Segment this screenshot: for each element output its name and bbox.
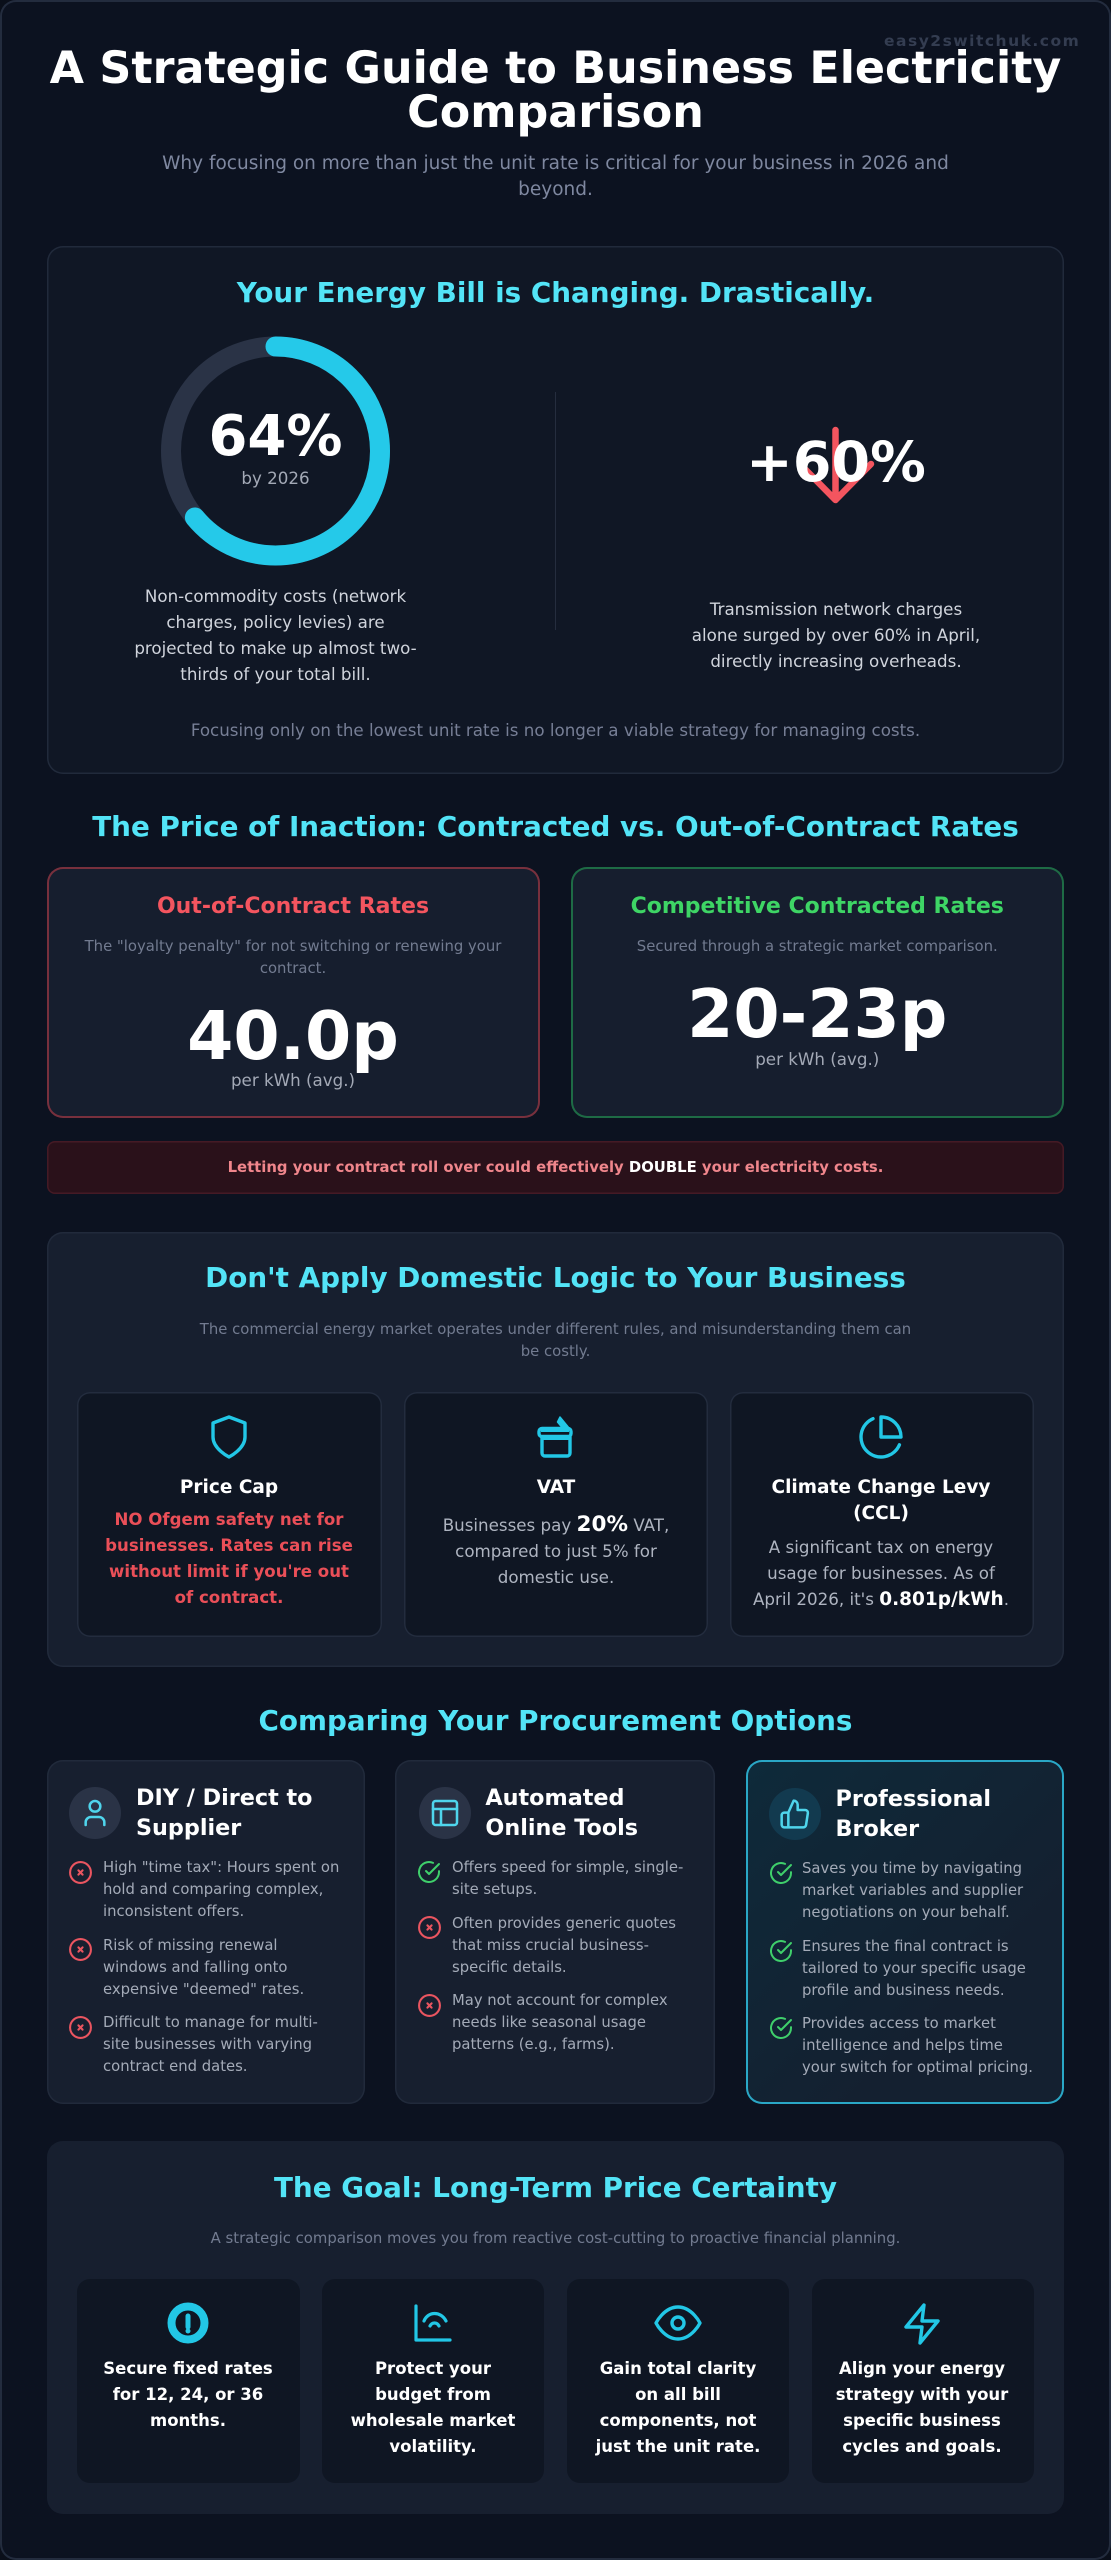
text: non-commodity costs: charges, policy levies) are: [166, 612, 385, 632]
callout text: Letting your contract roll over could effectively DOUBLE your electricity costs.: [228, 1159, 883, 1176]
drawback text: expensive "deemed" rates.: [103, 1981, 304, 1998]
goal text: volatility.: [389, 2437, 477, 2456]
card description: [84, 937, 502, 977]
icon: cross: [69, 1861, 92, 1884]
goal text: wholesale market: [351, 2411, 515, 2430]
card text: without limit if you're out: [109, 1562, 349, 1581]
card text: A significant tax on energy: [769, 1536, 993, 1556]
card text: compared to just 5% for: [455, 1540, 657, 1560]
drawback text: [103, 1937, 304, 1998]
card text: April 2026, it's 0.801p/kWh.: [753, 1588, 1009, 1610]
icon: check: [770, 1862, 792, 1884]
panel: DIY direct to supplier: [47, 1760, 365, 2104]
benefit text: intelligence and helps time: [802, 2037, 1003, 2054]
drawback text: [103, 1859, 339, 1920]
benefit text: profile and business needs.: [802, 1982, 1005, 1999]
panel: professional broker: [746, 1760, 1064, 2104]
card text: domestic use.: [498, 1566, 614, 1586]
option title: Broker: [836, 1816, 919, 1842]
card: align strategy: [812, 2279, 1034, 2483]
goal text: [322, 2356, 544, 2460]
donut chart: 64 percent: [161, 336, 390, 566]
title: Comparison: [407, 87, 704, 138]
card: protect budget: [322, 2279, 544, 2483]
text: transmission charges: [692, 599, 980, 671]
benefit text: [452, 1859, 683, 1898]
card title: Price Cap: [180, 1477, 278, 1498]
footnote: Focusing only on the lowest unit rate is no longer a viable strategy for managing costs.: [191, 720, 920, 740]
card text: Businesses pay 20% VAT,: [443, 1512, 669, 1536]
benefit text: Offers speed for simple, single-: [452, 1859, 683, 1876]
drawback text: May not account for complex: [452, 1992, 668, 2009]
panel: automated online tools: [395, 1760, 715, 2104]
benefit text: tailored to your specific usage: [802, 1960, 1026, 1977]
card title: (CCL): [853, 1503, 909, 1524]
card title: [772, 1477, 990, 1524]
drawback text: inconsistent offers.: [103, 1903, 244, 1920]
drawback text: that miss crucial business-: [452, 1937, 649, 1954]
card: VAT: [404, 1392, 708, 1637]
goal text: Align your energy: [839, 2359, 1005, 2378]
subtitle: [162, 153, 949, 200]
panel: energy bill changing: [47, 246, 1064, 774]
card description: The "loyalty penalty" for not switching or renewing your: [85, 937, 501, 955]
drawback text: [452, 1992, 668, 2053]
goal text: Gain total clarity: [600, 2359, 756, 2378]
drawback text: Often provides generic quotes: [452, 1915, 676, 1932]
drawback text: windows and falling onto: [103, 1959, 287, 1976]
goal text: [567, 2356, 789, 2460]
description: [200, 1320, 911, 1360]
panel: domestic logic: [47, 1232, 1064, 1667]
text: transmission charges: alone surged by over 60% in April,: [692, 625, 980, 645]
card title: VAT: [537, 1477, 575, 1498]
goal text: specific business: [843, 2411, 1001, 2430]
option title: [136, 1785, 313, 1841]
icon: cross: [418, 1916, 441, 1939]
drawback text: [103, 2014, 318, 2075]
icon: chart: [414, 2304, 452, 2342]
benefit text: Saves you time by navigating: [802, 1860, 1022, 1877]
option title: [485, 1785, 638, 1841]
card: total clarity: [567, 2279, 789, 2483]
subtitle: beyond.: [518, 179, 593, 200]
benefit text: your switch for optimal pricing.: [802, 2059, 1033, 2076]
benefit text: [802, 1860, 1024, 1921]
card title: Climate Change Levy: [772, 1477, 990, 1498]
panel: out-of-contract rates: [46, 867, 540, 1118]
card text: NO Ofgem safety net for: [115, 1510, 343, 1529]
card: price cap: [77, 1392, 382, 1637]
stat: 64%: 64%: [208, 404, 343, 469]
goal text: Secure fixed rates: [103, 2359, 273, 2378]
rate unit: per kWh (avg.): [755, 1048, 879, 1068]
drawback text: High "time tax": Hours spent on: [103, 1859, 339, 1876]
icon: layout: [418, 1787, 470, 1839]
goal text: Protect your: [375, 2359, 491, 2378]
benefit text: [802, 1938, 1026, 1999]
drawback text: needs like seasonal usage: [452, 2014, 646, 2031]
option title: Supplier: [136, 1815, 241, 1841]
icon: check: [418, 1861, 440, 1883]
icon: check: [770, 1940, 792, 1962]
icon: cross: [418, 1994, 441, 2017]
callout: double costs warning: [47, 1141, 1064, 1194]
card heading: Competitive Contracted Rates: [631, 894, 1004, 919]
goal text: [812, 2356, 1032, 2460]
panel: competitive contracted rates: [570, 867, 1064, 1118]
description: A strategic comparison moves you from reactive cost-cutting to proactive financial planning.: [211, 2229, 900, 2247]
card text: [753, 1536, 1009, 1610]
goal text: on all bill: [635, 2385, 721, 2404]
option title: DIY / Direct to: [136, 1785, 313, 1811]
card text: usage for businesses. As of: [767, 1562, 995, 1582]
rate value: 20-23p: [687, 974, 947, 1052]
goal text: months.: [150, 2411, 226, 2430]
card: climate change levy: [730, 1392, 1034, 1637]
description: The commercial energy market operates under different rules, and misunderstanding them can: [200, 1320, 911, 1338]
card description: Secured through a strategic market comparison.: [637, 937, 998, 955]
icon: check: [770, 2017, 792, 2039]
text: non-commodity costs: projected to make up almost two-: [134, 638, 417, 658]
card description: contract.: [260, 959, 326, 977]
benefit text: site setups.: [452, 1881, 537, 1898]
panel: long-term price certainty: [47, 2141, 1064, 2514]
divider: [555, 392, 556, 630]
card text: [443, 1512, 669, 1586]
icon: thumbs up: [769, 1788, 821, 1840]
card text: of contract.: [175, 1588, 283, 1607]
drawback text: Difficult to manage for multi-: [103, 2014, 318, 2031]
watermark: easy2switchuk.com: [884, 32, 1080, 50]
title: [50, 43, 1061, 138]
icon: shield: [211, 1415, 247, 1459]
icon: pie chart: [859, 1415, 903, 1459]
text: non-commodity costs: thirds of your total bill.: [180, 664, 371, 684]
benefit text: Provides access to market: [802, 2015, 996, 2032]
option title: [836, 1786, 991, 1842]
text: non-commodity costs: Non-commodity costs (network: [145, 586, 406, 606]
drawback text: contract end dates.: [103, 2058, 248, 2075]
subtitle: Why focusing on more than just the unit rate is critical for your business in 2026 and: [162, 153, 949, 174]
benefit text: negotiations on your behalf.: [802, 1904, 1010, 1921]
option title: Professional: [836, 1786, 991, 1812]
card text: [105, 1510, 353, 1607]
heading: energy bill: Your Energy Bill is Changing. Drastically.: [237, 276, 874, 309]
text: non-commodity costs: [134, 586, 417, 684]
goal text: strategy with your: [836, 2385, 1008, 2404]
drawback text: site businesses with varying: [103, 2036, 312, 2053]
drawback text: hold and comparing complex,: [103, 1881, 323, 1898]
goal text: for 12, 24, or 36: [113, 2385, 263, 2404]
text: transmission charges: directly increasing overheads.: [710, 651, 962, 671]
goal text: just the unit rate.: [596, 2437, 760, 2456]
heading: procurement options: Comparing Your Procurement Options: [259, 1704, 852, 1737]
option title: Online Tools: [485, 1815, 638, 1841]
card text: businesses. Rates can rise: [105, 1536, 353, 1555]
benefit text: market variables and supplier: [802, 1882, 1023, 1899]
benefit text: Ensures the final contract is: [802, 1938, 1009, 1955]
drawback text: [452, 1915, 676, 1976]
description: be costly.: [521, 1342, 590, 1360]
rate unit: per kWh (avg.): [231, 1070, 355, 1090]
drawback text: Risk of missing renewal: [103, 1937, 278, 1954]
card: fixed rates: [77, 2279, 300, 2483]
goal text: budget from: [375, 2385, 491, 2404]
stat label: by 2026: by 2026: [241, 468, 310, 488]
card heading: Out-of-Contract Rates: [157, 894, 429, 919]
title: A Strategic Guide to Business Electricity: [50, 43, 1061, 94]
goal text: [103, 2359, 273, 2430]
icon: box with tab: [537, 1416, 573, 1458]
icon: cross: [69, 1938, 92, 1961]
text: transmission charges: Transmission network charges: [710, 599, 962, 619]
icon: person: [69, 1787, 121, 1839]
benefit text: [802, 2015, 1033, 2076]
icon: red down arrow: [807, 426, 874, 504]
icon: lightning bolt: [898, 2299, 946, 2347]
icon: cross: [69, 2016, 92, 2039]
goal text: components, not: [600, 2411, 756, 2430]
icon: lock ring: [168, 2302, 208, 2344]
goal text: cycles and goals.: [842, 2437, 1002, 2456]
stat: +60%: +60%: [746, 430, 926, 495]
drawback text: specific details.: [452, 1959, 567, 1976]
option title: Automated: [485, 1785, 625, 1811]
rate value: 40.0p: [187, 996, 399, 1074]
drawback text: patterns (e.g., farms).: [452, 2036, 615, 2053]
icon: eye: [654, 2299, 702, 2347]
heading: domestic logic: Don't Apply Domestic Logic to Your Business: [205, 1261, 906, 1294]
heading: the goal: The Goal: Long-Term Price Certainty: [274, 2171, 837, 2204]
heading: price of inaction: The Price of Inaction: Contracted vs. Out-of-Contract Rates: [92, 810, 1019, 843]
